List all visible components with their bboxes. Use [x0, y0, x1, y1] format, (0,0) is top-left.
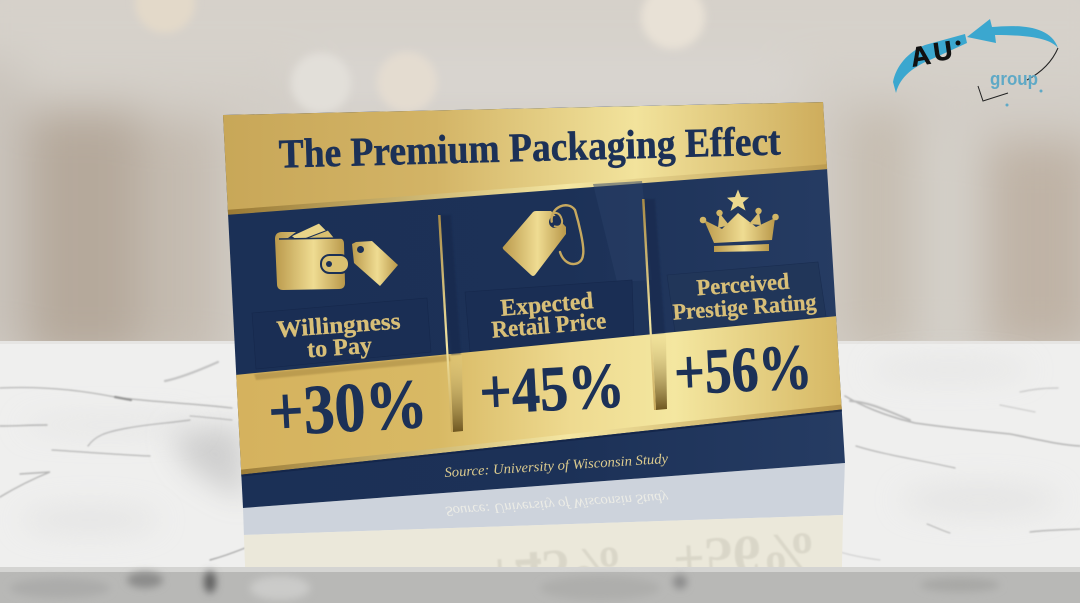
- column two lighter diagonal: [593, 181, 642, 187]
- label: perceived prestige rating: Perceived: [696, 269, 790, 300]
- icon: hanging price tag: [503, 205, 583, 276]
- stat: +45%: +45%: [478, 349, 626, 428]
- marble table front edge: [0, 567, 1080, 603]
- stat: +30%: +30%: [266, 366, 429, 451]
- icon: crown with star: [700, 190, 779, 252]
- logo swoosh left: [893, 34, 967, 93]
- label panel: retail: [465, 280, 634, 352]
- label: perceived prestige rating: Prestige Rating: [672, 289, 818, 325]
- label: willingness to pay: [276, 309, 401, 363]
- title trim: [225, 164, 829, 215]
- logo arrow: [967, 19, 1058, 48]
- logo small dots: [1006, 90, 1042, 106]
- label: willingness to pay: to Pay: [306, 333, 373, 363]
- card reflection on marble: +56%: [671, 520, 818, 590]
- stats band upper shading: [254, 355, 451, 380]
- AU group logo: [893, 19, 1058, 106]
- logo dot: [956, 40, 960, 46]
- card: [220, 102, 846, 508]
- marble table top: [0, 341, 1080, 569]
- divider one: [438, 215, 463, 432]
- divider two: [642, 199, 667, 410]
- icon: small price tag: [352, 241, 398, 286]
- icon: wallet: [275, 223, 349, 290]
- logo letter U: U: [931, 35, 954, 67]
- card navy base: [223, 102, 845, 508]
- logo thin lines: [978, 48, 1058, 101]
- panel: title band: [220, 102, 829, 214]
- logo letter A: A: [908, 40, 933, 73]
- card reflection on marble: [243, 463, 845, 567]
- blurred background wall: [0, 0, 1080, 360]
- label: expected retail price: Retail Price: [491, 308, 608, 344]
- card reflection on marble: +45%: [483, 535, 625, 603]
- stat: +56%: +56%: [672, 331, 814, 408]
- stats trim: [238, 404, 846, 475]
- footer shading strip: [238, 409, 846, 477]
- label: willingness to pay: Willingness: [276, 309, 401, 343]
- title: The Premium Packaging Effect: [278, 117, 781, 177]
- label panel: prestige: [667, 262, 826, 332]
- label panel: willingness: [252, 298, 431, 369]
- source note: Source: University of Wisconsin Study: [444, 452, 669, 481]
- label: expected retail price: Expected: [499, 288, 595, 322]
- reflected source text: Source: University of Wisconsin Study: [445, 489, 669, 518]
- label: expected retail price: [491, 288, 608, 344]
- label: perceived prestige rating: [672, 269, 818, 325]
- panel: statistics band: [235, 316, 846, 474]
- logo word group: group: [990, 69, 1038, 89]
